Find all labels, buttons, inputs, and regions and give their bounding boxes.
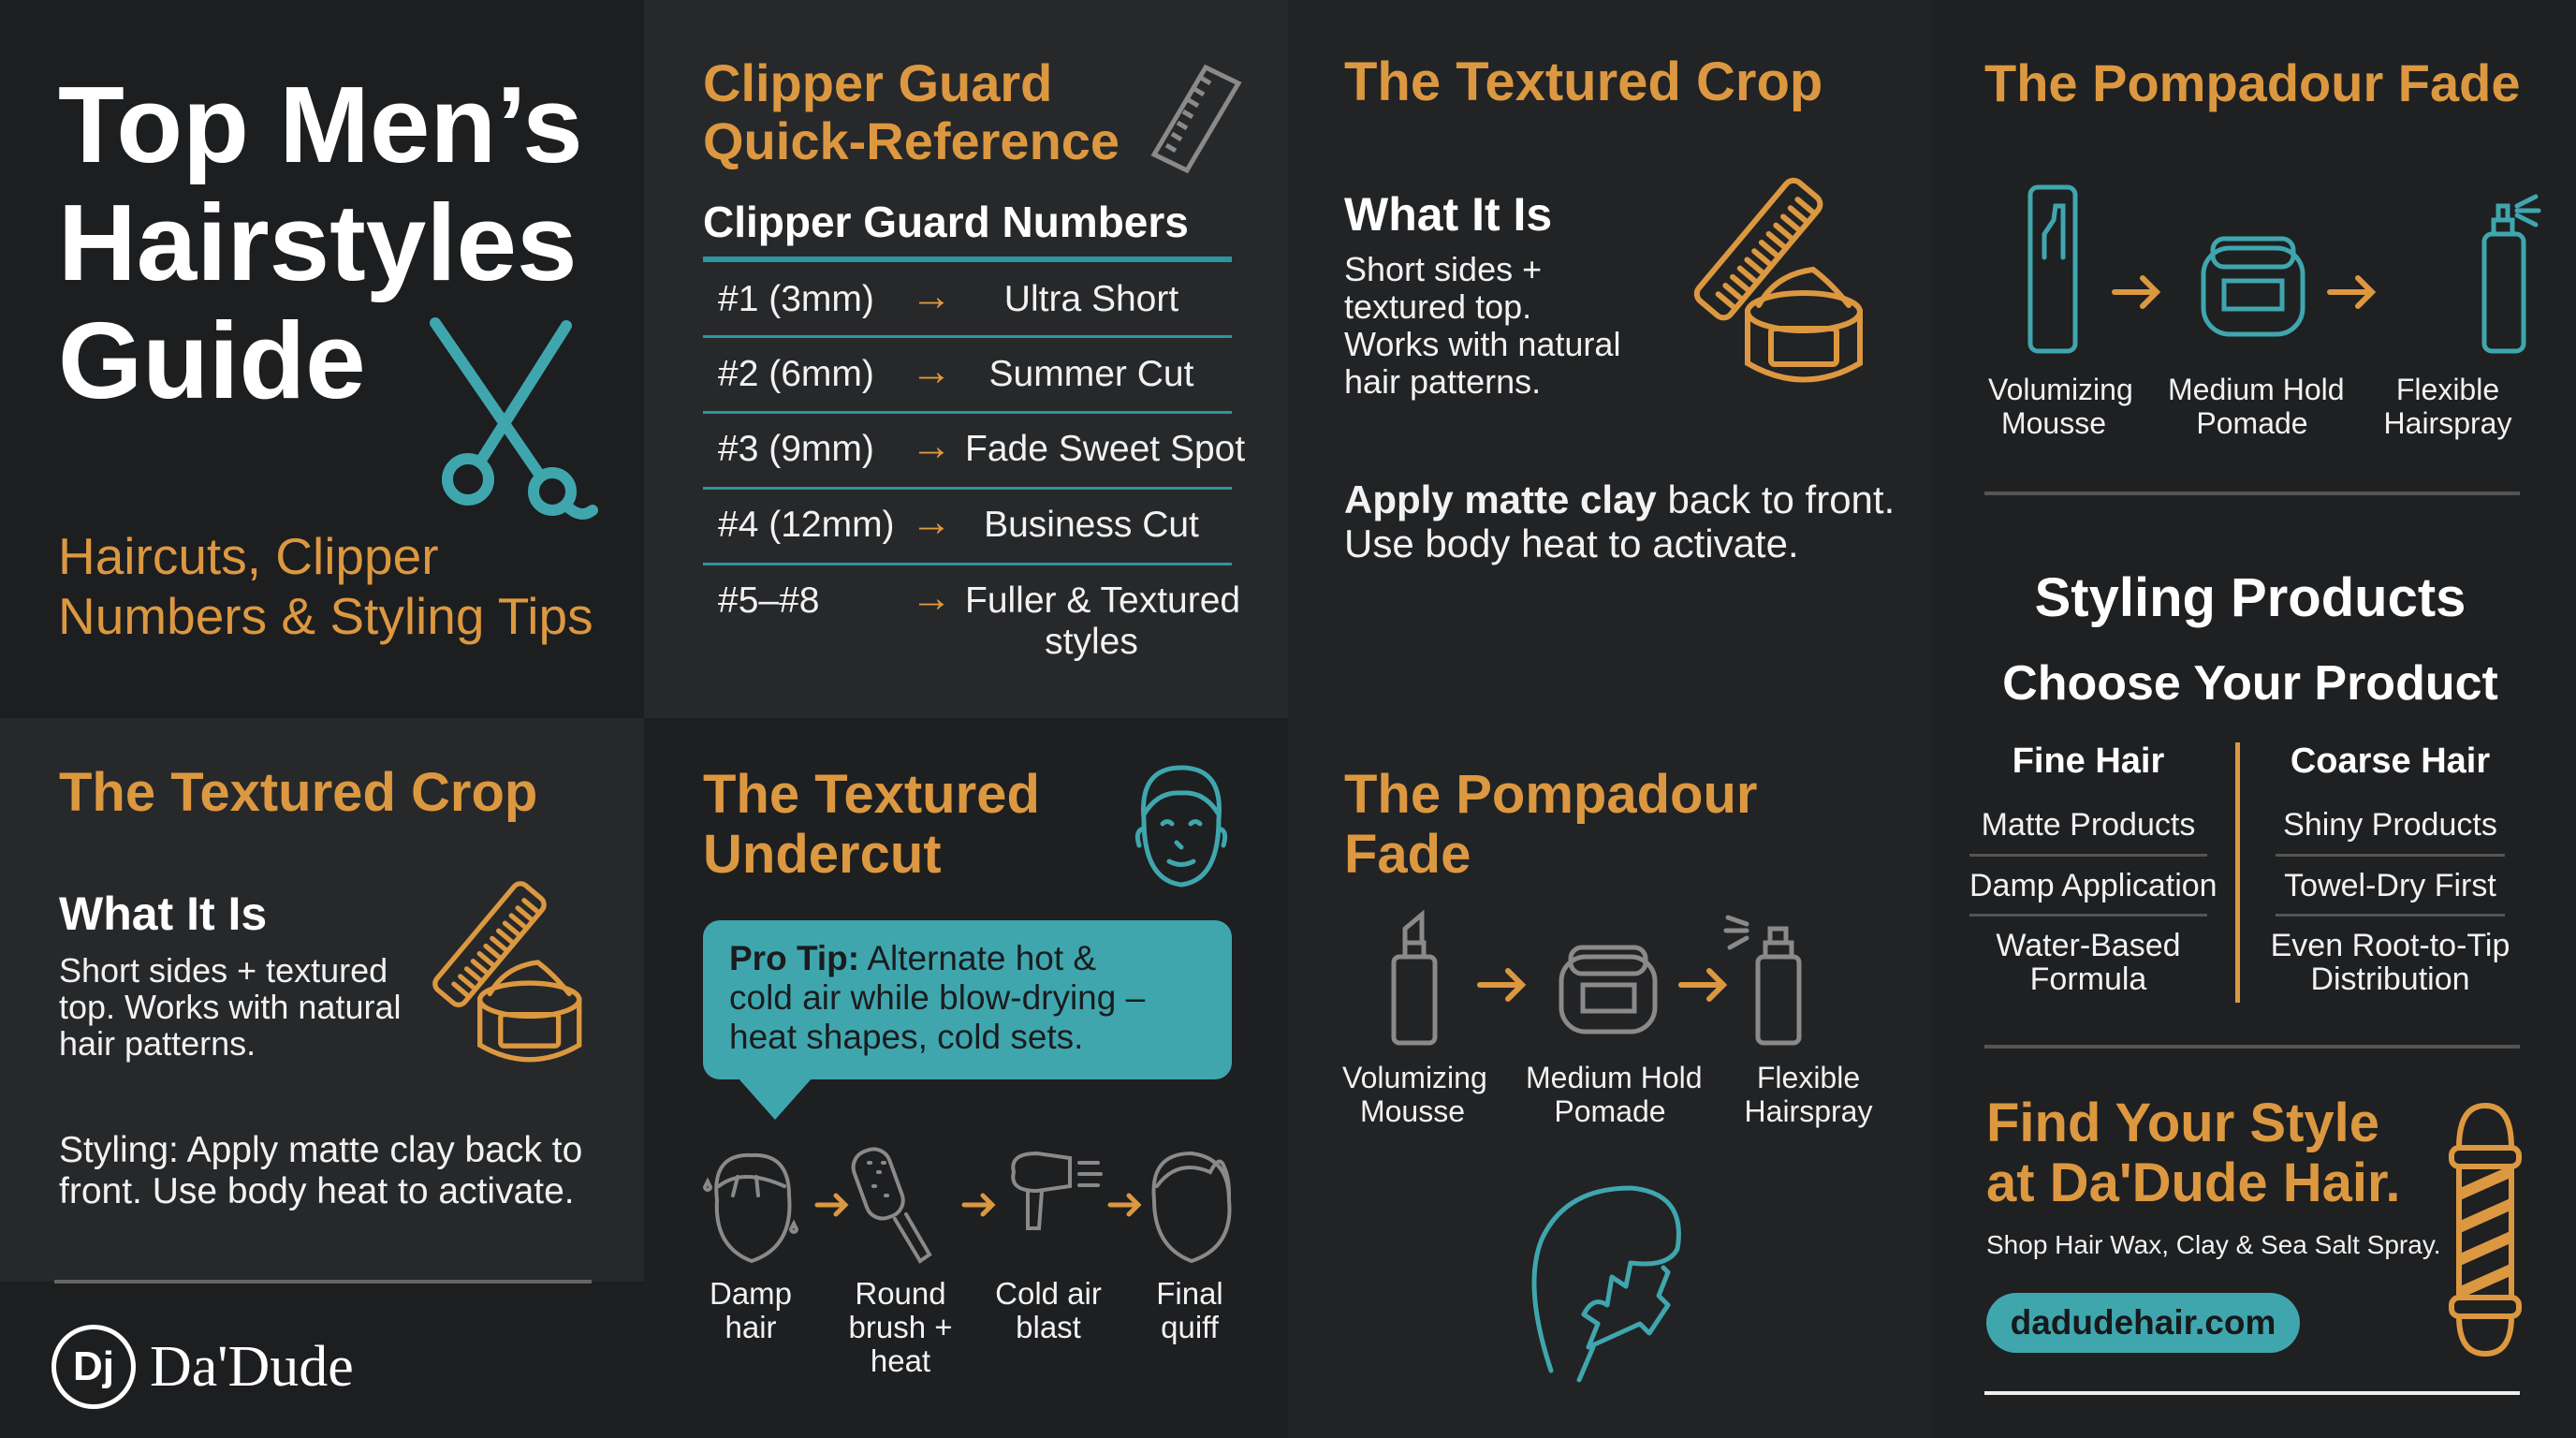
table rows: → — [911, 273, 952, 319]
panel: textured undercut: quiff — [1161, 1310, 1219, 1344]
heading — [703, 53, 1120, 170]
table rows: #5–#8 — [718, 580, 819, 621]
panel: pompadour and products: Medium Hold — [2168, 373, 2345, 406]
styling text — [59, 1130, 582, 1211]
table: products: Coarse Hair — [2291, 741, 2490, 781]
table rows: #4 (12mm) — [718, 505, 895, 545]
subtitle — [58, 527, 593, 645]
panel: pompadour and products: Shop Hair Wax, Clay & Sea Salt Spray. — [1986, 1230, 2441, 1259]
icon: barber pole — [2449, 1103, 2522, 1357]
logo — [51, 1325, 354, 1409]
table rows: styles — [1045, 622, 1138, 662]
panel: pompadour and products: Choose Your Product — [2002, 656, 2498, 711]
table: products: Matte Products — [1982, 807, 2195, 843]
call to action — [1986, 1093, 2400, 1213]
body text: Short sides + textured — [59, 951, 388, 990]
panel: textured undercut: heat — [871, 1343, 930, 1378]
icon: comb and jar — [1694, 178, 1863, 382]
styling text — [1344, 477, 1895, 565]
call to action: Find Your Style — [1986, 1093, 2379, 1153]
labels: Mousse — [1360, 1094, 1465, 1128]
panel: textured crop top — [1288, 0, 1932, 718]
panel: pompadour fade bottom — [1288, 718, 1932, 1438]
heading — [1344, 764, 1757, 885]
panel: title — [0, 0, 644, 718]
body text: Works with natural — [1344, 325, 1620, 363]
panel: textured undercut: Final — [1156, 1276, 1223, 1311]
subheading: What It Is — [1344, 188, 1552, 241]
labels: Damp — [710, 1276, 792, 1311]
labels — [1988, 373, 2133, 440]
icon row: products — [1391, 910, 1801, 1045]
heading — [703, 764, 1040, 885]
panel: pompadour and products: Pomade — [2196, 406, 2308, 440]
table: products: Even Root-to-Tip — [2271, 928, 2510, 963]
panel: pompadour and products: Flexible — [2396, 373, 2499, 406]
heading: The Textured Crop — [59, 762, 537, 823]
title — [58, 64, 583, 421]
table rows: Fuller & Textured — [965, 580, 1240, 621]
body text: textured top. — [1344, 287, 1531, 326]
table: products: Water-Based — [1996, 928, 2181, 963]
styling text: Use body heat to activate. — [1344, 521, 1799, 565]
subtitle: Haircuts, Clipper — [58, 527, 439, 585]
table rows: → — [911, 348, 952, 394]
table: products: Distribution — [2310, 961, 2470, 997]
body text: top. Works with natural — [59, 988, 401, 1026]
callout: pro tip: heat shapes, cold sets. — [729, 1018, 1083, 1056]
icon row: blow-dry steps — [703, 1147, 1232, 1264]
panel: textured undercut — [644, 718, 1288, 1438]
styling text: Styling: Apply matte clay back to — [59, 1130, 582, 1170]
table: products: Towel-Dry First — [2284, 868, 2496, 903]
subheading: Clipper Guard Numbers — [703, 198, 1189, 246]
heading: Fade — [1344, 824, 1471, 885]
labels: hair — [724, 1310, 777, 1344]
labels — [710, 1276, 792, 1344]
table rows: #2 (6mm) — [718, 354, 874, 394]
panel: textured undercut: Cold air — [995, 1276, 1102, 1311]
title: Guide — [58, 300, 366, 421]
icon: scissors — [430, 317, 598, 520]
styling text: Apply matte clay back to front. — [1344, 477, 1895, 521]
heading: styling products: Styling Products — [2035, 567, 2466, 628]
button: website — [1986, 1293, 2300, 1353]
panel: pompadour fade bottom: Medium Hold — [1526, 1061, 1703, 1094]
table rows: → — [911, 575, 952, 621]
icon: pompadour head — [1531, 1185, 1681, 1382]
button: website: dadudehair.com — [2011, 1303, 2276, 1342]
panel: pompadour and products — [1932, 0, 2576, 1438]
heading: The Pompadour — [1344, 764, 1757, 825]
icon: face — [1134, 766, 1228, 888]
title: Top Men’s — [58, 64, 583, 185]
icon: ruler — [1151, 64, 1241, 174]
table rows: → — [911, 499, 952, 545]
labels: Mousse — [2001, 406, 2106, 440]
table: products: Shiny Products — [2283, 807, 2497, 843]
labels: Volumizing — [1342, 1061, 1487, 1094]
heading: Quick-Reference — [703, 111, 1120, 170]
table: products: Fine Hair — [2012, 741, 2164, 781]
table rows — [703, 273, 1245, 662]
icon row: products — [2027, 185, 2540, 354]
table rows: #3 (9mm) — [718, 429, 874, 469]
table rows: → — [911, 423, 952, 469]
table rows: Business Cut — [984, 505, 1199, 545]
logo: Dj — [73, 1343, 114, 1389]
panel: pompadour fade bottom: Hairspray — [1745, 1094, 1872, 1128]
callout: pro tip: cold air while blow-drying – — [729, 978, 1145, 1017]
call to action: at Da'Dude Hair. — [1986, 1152, 2400, 1213]
panel: textured undercut: Round — [855, 1276, 946, 1311]
panel: textured undercut: blast — [1016, 1310, 1081, 1344]
heading: Clipper Guard — [703, 53, 1052, 112]
panel: pompadour and products: Hairspray — [2384, 406, 2511, 440]
table: products — [1969, 741, 2510, 1003]
subtitle: Numbers & Styling Tips — [58, 587, 593, 645]
heading: The Pompadour Fade — [1984, 53, 2520, 112]
panel: clipper guard — [644, 0, 1288, 718]
heading: Undercut — [703, 824, 942, 885]
panel: pompadour fade bottom: Flexible — [1757, 1061, 1860, 1094]
styling text: front. Use body heat to activate. — [59, 1171, 575, 1211]
heading: The Textured Crop — [1344, 51, 1822, 112]
title: Hairstyles — [58, 182, 578, 303]
labels — [1342, 1061, 1487, 1128]
callout: pro tip: Pro Tip: Alternate hot & — [729, 939, 1096, 977]
icon: comb and jar — [432, 881, 582, 1062]
table rows: Summer Cut — [989, 354, 1193, 394]
table rows: Fade Sweet Spot — [965, 429, 1245, 469]
table: products: Damp Application — [1969, 868, 2217, 903]
body text: hair patterns. — [1344, 362, 1541, 401]
panel: textured crop bottom — [0, 718, 644, 1438]
table: products: Formula — [2030, 961, 2146, 997]
heading: The Textured — [703, 764, 1040, 825]
body text — [1344, 250, 1620, 401]
table rows: Ultra Short — [1004, 279, 1178, 319]
table rows: #1 (3mm) — [718, 279, 874, 319]
subheading: What It Is — [59, 888, 267, 940]
body text — [59, 951, 401, 1063]
body text: Short sides + — [1344, 250, 1542, 288]
body text: hair patterns. — [59, 1024, 256, 1063]
panel: textured undercut: brush + — [848, 1310, 953, 1344]
panel: pompadour fade bottom: Pomade — [1554, 1094, 1666, 1128]
labels: Volumizing — [1988, 373, 2133, 406]
callout: pro tip — [703, 920, 1232, 1079]
logo: Da'Dude — [150, 1335, 354, 1399]
